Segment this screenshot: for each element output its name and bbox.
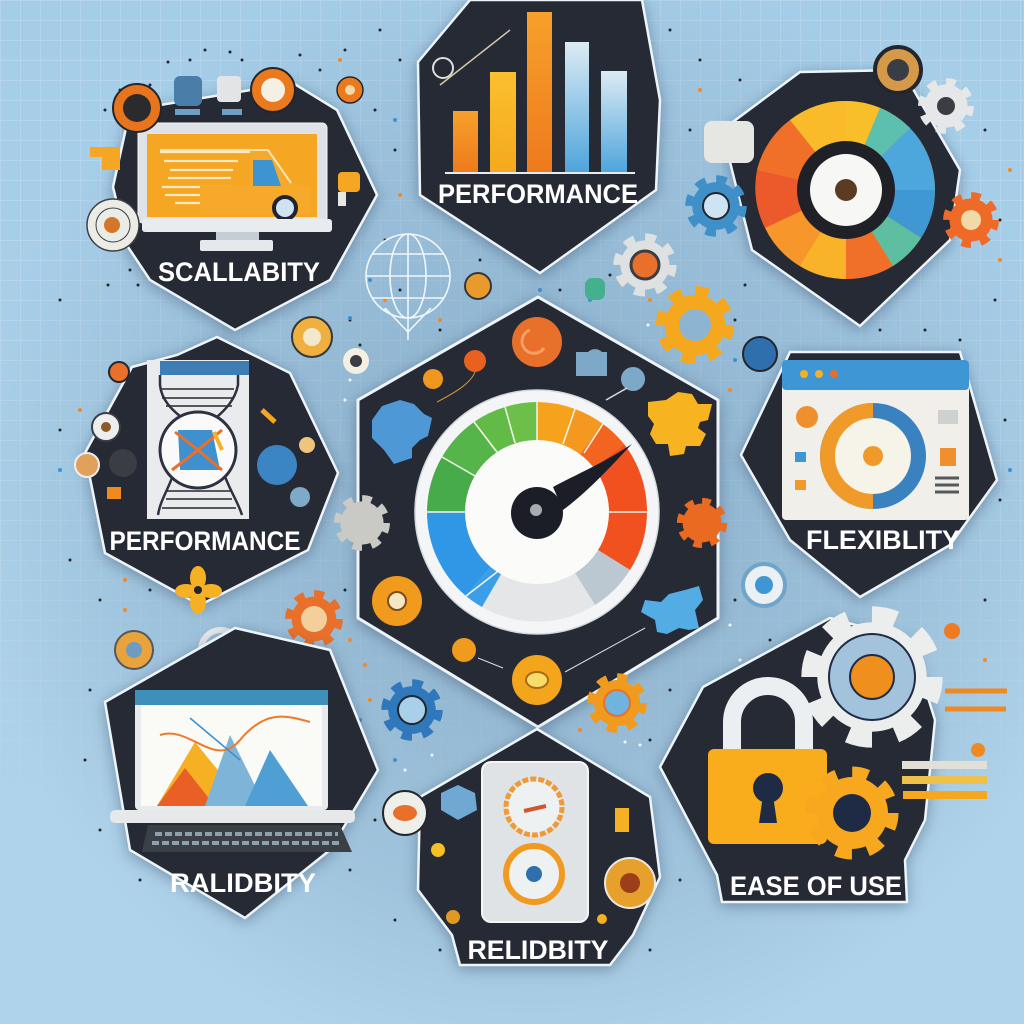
icon: flower (175, 566, 222, 614)
panel: top right dial (690, 47, 995, 326)
icon: mid gears (292, 238, 777, 374)
bar chart (433, 12, 635, 173)
chart: colour wheel (755, 101, 935, 279)
icon: side badges (75, 362, 315, 507)
label: PERFORMANCE (110, 526, 300, 556)
label: RELIDBITY (468, 935, 608, 965)
label: FLEXIBLITY (806, 525, 960, 555)
panel: ease of use (660, 616, 1007, 902)
label: SCALLABITY (158, 257, 320, 287)
panel: performance left (75, 337, 338, 605)
icon: wire globe (366, 234, 450, 340)
icon: gears (811, 616, 933, 853)
icons: central hex ornaments (338, 317, 724, 705)
panel: reliability bottom-centre (383, 729, 660, 965)
icon: lower gears (115, 564, 785, 736)
panel: scalability (87, 68, 377, 330)
icon: document hourglass (147, 360, 249, 519)
icon: laptop with mountain chart (110, 690, 355, 852)
panel: performance top (418, 0, 660, 273)
label: EASE OF USE (730, 871, 902, 901)
icon: satellite gears (690, 47, 995, 244)
panel: reliability bottom-left (105, 628, 378, 918)
icon: small badges (87, 68, 363, 251)
chart: speedometer gauge (415, 390, 659, 634)
label: RALIDBITY (170, 868, 316, 898)
panel: flexibility (741, 352, 997, 597)
icon: device with dials (383, 762, 655, 924)
icon: browser window with chart (782, 360, 969, 520)
label: PERFORMANCE (438, 179, 638, 209)
panel: central gauge (338, 297, 724, 727)
icon: padlock (708, 686, 827, 844)
icon: speed lines (902, 623, 1007, 795)
icon: monitor with delivery van (138, 123, 332, 251)
